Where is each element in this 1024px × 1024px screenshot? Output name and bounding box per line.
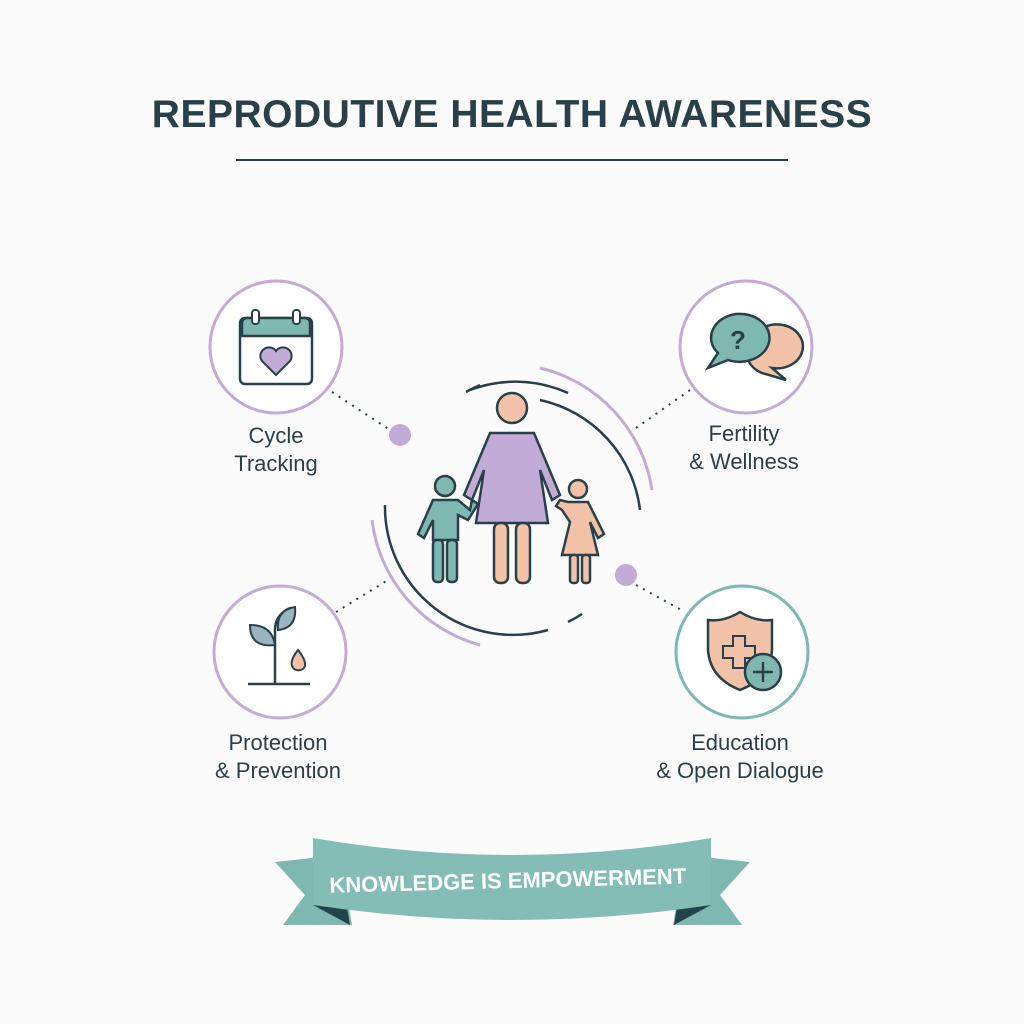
icon: shield	[676, 586, 808, 718]
label: cycle tracking	[234, 423, 318, 476]
title: REPRODUTIVE HEALTH AWARENESS	[152, 93, 872, 136]
banner: KNOWLEDGE IS EMPOWERMENT	[329, 863, 687, 898]
label: education	[656, 730, 824, 783]
label: cycle tracking: Tracking	[234, 451, 318, 476]
label: education: Education	[691, 730, 789, 755]
icon: plant	[214, 586, 346, 718]
central family	[372, 368, 652, 645]
label: education: & Open Dialogue	[656, 758, 824, 783]
icon: cycle tracking	[210, 281, 342, 413]
label: protection: Protection	[228, 730, 328, 755]
label: protection	[215, 730, 341, 783]
icon: fertility chat: ?	[730, 325, 746, 355]
label: fertility	[689, 421, 799, 474]
label: cycle tracking: Cycle	[248, 423, 304, 448]
banner	[275, 838, 750, 925]
label: fertility: Fertility	[709, 421, 779, 446]
icon: fertility chat	[680, 281, 812, 413]
label: fertility: & Wellness	[689, 449, 799, 474]
label: protection: & Prevention	[215, 758, 341, 783]
